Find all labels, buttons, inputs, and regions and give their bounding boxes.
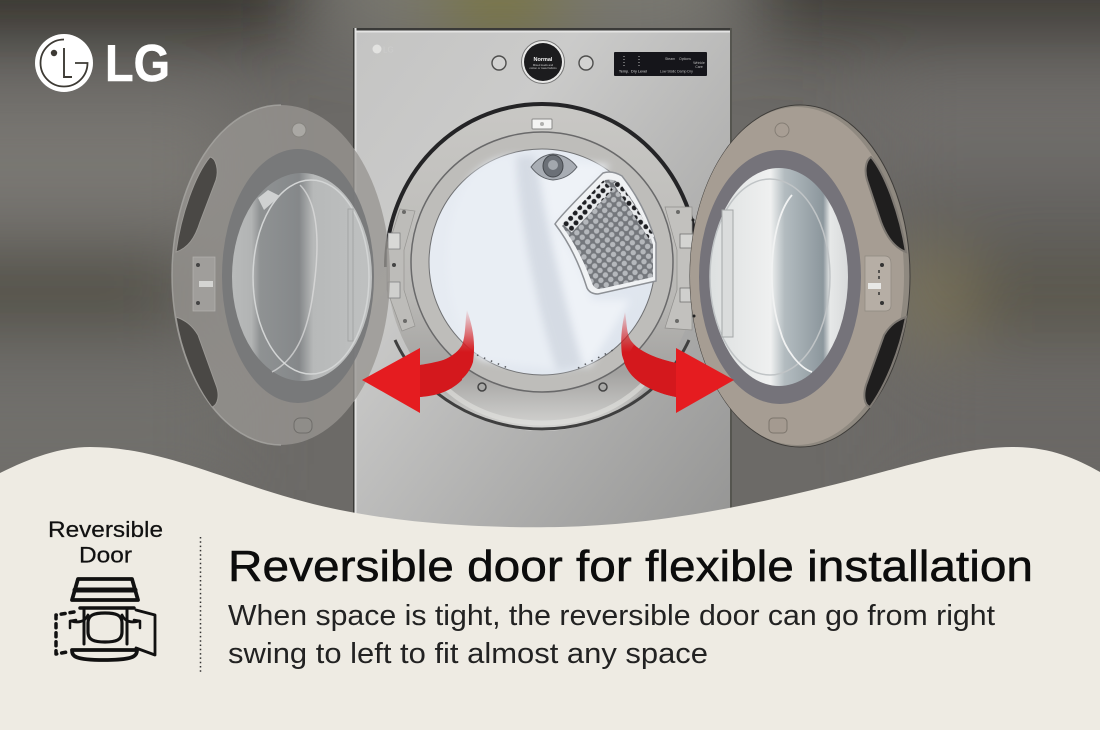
feature label: Door <box>79 542 133 568</box>
control: dial display: cotton or towel fabrics <box>529 66 557 70</box>
left hinge plate <box>387 209 415 331</box>
arrow: left swing <box>362 310 474 413</box>
lower panel <box>0 447 1100 730</box>
LG logo <box>35 34 170 93</box>
headline: Reversible door for flexible installation <box>228 542 1033 591</box>
feature label: Reversible <box>48 517 163 542</box>
dryer body <box>353 28 732 528</box>
left door knobs <box>292 123 312 433</box>
lower screws <box>478 383 607 391</box>
right door inner hinge <box>692 218 696 318</box>
control: options panel <box>614 52 707 76</box>
control: dial display: Normal <box>534 57 553 63</box>
right door glass <box>710 168 848 386</box>
left door glass <box>232 173 372 381</box>
icon: dryer with reversible door <box>56 579 155 660</box>
right door grips <box>864 157 906 407</box>
logo wordmark: LG <box>105 35 170 93</box>
control: options panel: Dry Level <box>631 70 647 74</box>
control: dial display <box>522 40 564 84</box>
control: left button <box>492 56 506 70</box>
right hinge plate <box>665 207 694 330</box>
right door <box>690 105 910 447</box>
control: dial display: Mixed loads and <box>533 63 554 67</box>
left door (translucent) <box>172 105 390 445</box>
door opening <box>386 103 698 431</box>
latch <box>532 119 552 129</box>
right door hinge plate <box>865 256 891 311</box>
left door hinge plate <box>193 257 215 311</box>
left door seal <box>222 149 374 403</box>
control: options panel: Wrinkle <box>693 61 705 65</box>
arrow: right swing <box>621 312 734 413</box>
control: options panel: Temp. <box>619 70 629 74</box>
right door knobs <box>769 123 789 433</box>
control: options panel: Care <box>695 65 703 69</box>
drum shading <box>447 156 630 370</box>
dotted divider <box>200 537 202 673</box>
control: options panel: Damp Dry <box>677 70 693 74</box>
control: right button <box>579 56 593 70</box>
control: options panel: Options <box>679 57 691 61</box>
lint filter mesh <box>555 172 656 294</box>
right door seal <box>699 150 861 404</box>
left door grips <box>176 157 218 407</box>
control: brand mark on panel <box>372 44 394 54</box>
control: options panel: Steam <box>665 57 675 61</box>
body text <box>228 600 995 670</box>
logo mark <box>35 34 93 92</box>
feature label <box>48 517 163 568</box>
sensor vent <box>531 154 577 180</box>
bottom vent dots <box>477 348 617 368</box>
control: brand mark on panel: LG <box>383 46 394 54</box>
body text: When space is tight, the reversible door can go from right <box>228 600 995 632</box>
control: options panel: Low Static <box>660 70 676 74</box>
body text: swing to left to fit almost any space <box>228 638 708 670</box>
